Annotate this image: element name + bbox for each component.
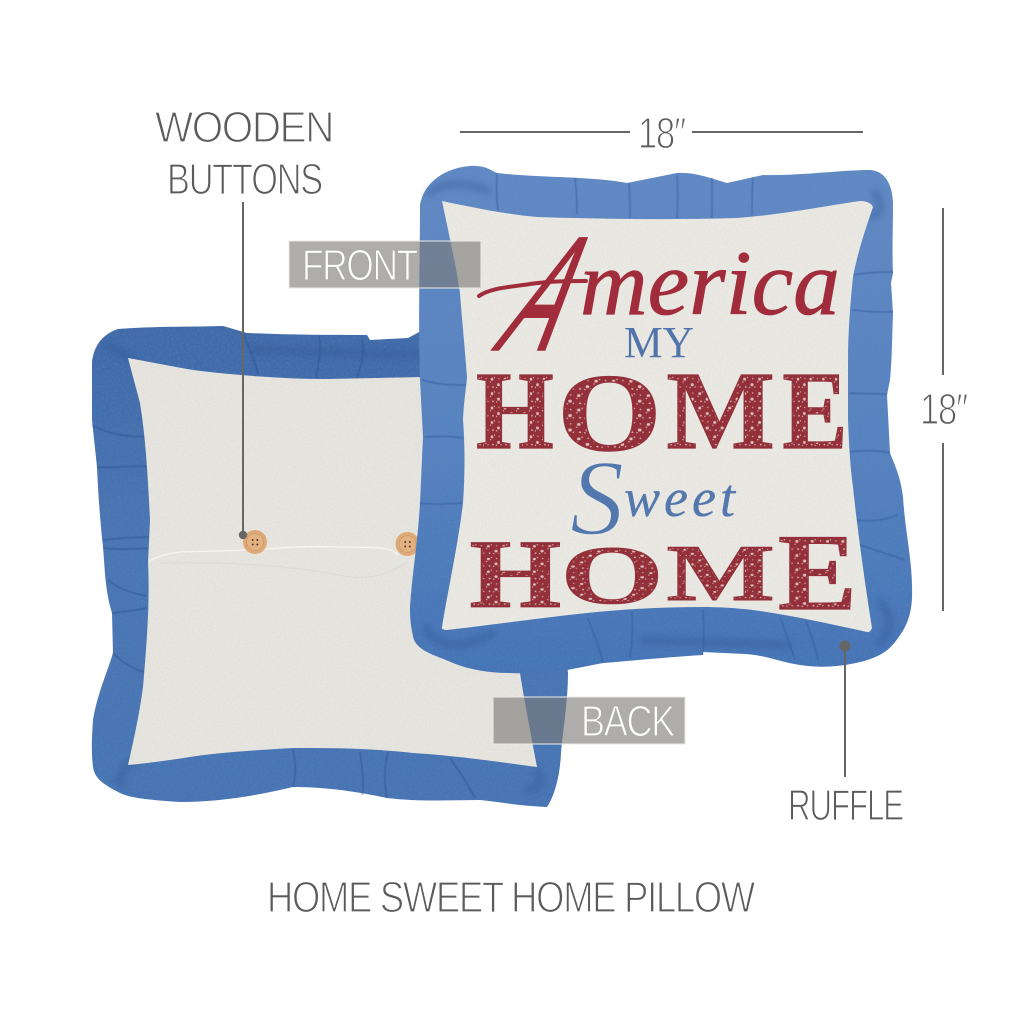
callout: ruffle [788,640,903,830]
pillow: back view [92,326,568,807]
embroidered word: Sweet: S [570,439,624,558]
front linen panel [442,201,873,632]
label box: BACK [493,697,685,746]
callout: wooden buttons: BUTTONS [167,155,322,204]
front ruffle [410,166,912,673]
callout: ruffle: RUFFLE [788,781,903,830]
callout: wooden buttons: WOODEN [155,103,333,152]
floral word: HOME upper: H [476,349,554,472]
embroidered word: America: merica [580,232,840,334]
floral word: HOME lower: E [778,512,857,633]
pillow: front view [410,166,912,673]
floral word: HOME upper: O [557,351,662,474]
floral word: HOME lower [470,512,857,633]
label box: FRONT: FRONT [302,241,417,290]
label box: BACK: BACK [581,697,675,746]
floral word: HOME upper: M [666,350,775,473]
title: HOME SWEET HOME PILLOW [267,873,756,922]
back ruffle pleats [92,333,475,798]
back envelope seam [149,547,407,578]
back ruffle corner shading [105,345,540,790]
dimension: height 18 inches: 18″ [920,385,968,434]
embroidered word: Sweet: weet [624,468,739,528]
floral word: HOME upper: E [782,349,847,472]
back linen panel [128,358,537,767]
floral word: HOME lower: O [560,529,664,621]
embroidered word: America [471,203,840,385]
back ruffle [92,326,568,807]
dimension: width 18 inches: 18″ [638,109,686,158]
callout: wooden buttons [155,103,333,539]
embroidered word: America: A [471,203,631,385]
embroidered word: MY: MY [624,318,694,367]
front ruffle pleats [420,173,905,663]
wooden button right [396,532,420,556]
floral word: HOME lower: M [666,528,775,618]
front ruffle corner shading [425,184,889,645]
floral word: HOME upper [476,349,847,474]
floral word: HOME lower: H [470,520,561,629]
wooden button left [243,530,267,554]
